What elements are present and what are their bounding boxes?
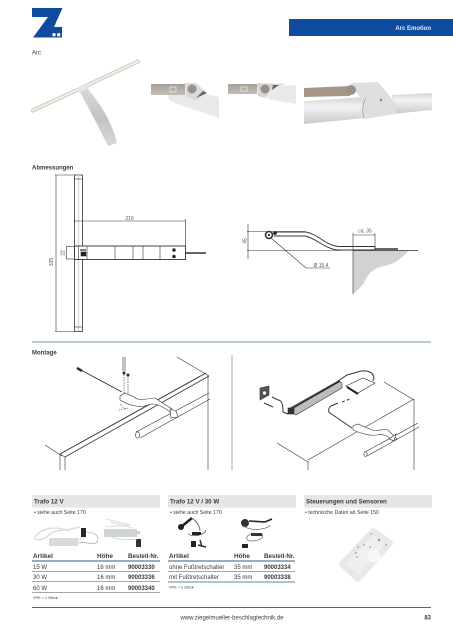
label: Arc: Arc <box>32 50 41 56</box>
label: Montage: Montage <box>32 350 57 356</box>
table: Artikel <box>33 553 53 560</box>
photo: joint detail 2 <box>228 83 296 104</box>
note: • siehe auch Seite 170 <box>170 510 222 516</box>
photo: Arc lamp <box>33 62 138 146</box>
table: Höhe <box>234 553 250 560</box>
table: 16 mm <box>97 586 115 592</box>
logo <box>32 8 62 38</box>
table <box>32 553 160 600</box>
product photos <box>35 519 141 547</box>
table: 30 W <box>33 575 47 581</box>
dimension labels top view: 210 <box>125 216 134 222</box>
footer website: www.ziegelmueller-beschlagtechnik.de <box>179 616 284 622</box>
divider <box>32 341 431 343</box>
table: 16 mm <box>97 575 115 581</box>
table: VPE = 1 Stück <box>169 586 194 590</box>
label: Abmessungen: Abmessungen <box>32 166 74 172</box>
product photos <box>178 518 272 548</box>
table: Bestell-Nr. <box>264 553 295 560</box>
heading bar: Trafo 12 V <box>34 498 64 506</box>
heading bar: Trafo 12 V / 30 W <box>170 498 219 506</box>
page number: 83 <box>424 616 432 622</box>
footer rule <box>32 606 431 608</box>
photo: joint detail 1 <box>151 83 219 118</box>
table: 35 mm <box>234 575 252 581</box>
panel: Trafo 12 V / 30 W <box>168 495 296 590</box>
dimension labels side view: ca. 35 <box>358 228 372 234</box>
drawing: mounting left <box>45 357 210 470</box>
heading bar: Steuerungen und Sensoren <box>306 498 387 506</box>
drawing: dimensions top view <box>55 175 206 332</box>
divider: vertical <box>231 355 233 470</box>
photo: joint detail 3 <box>304 82 432 124</box>
dimension labels side view: 45 <box>242 238 248 244</box>
panel: Steuerungen und Sensoren <box>304 495 432 579</box>
table: 35 mm <box>234 565 252 571</box>
panel: Trafo 12 V <box>32 495 160 600</box>
table: 60 W <box>33 586 47 592</box>
dimension labels top view <box>49 216 134 266</box>
header banner <box>289 19 453 36</box>
table: 90003336 <box>128 575 155 581</box>
table: VPE = 1 Stück <box>33 596 58 600</box>
dimension labels top view: 335 <box>49 258 55 266</box>
table: Artikel <box>169 553 189 560</box>
table: 16 mm <box>97 565 115 571</box>
dimension labels side view <box>242 228 372 269</box>
table: Höhe <box>97 553 113 560</box>
table <box>168 553 295 590</box>
table: mit Fußtretschalter <box>169 575 219 581</box>
note: • technische Daten ab Seite 150 <box>305 510 379 516</box>
table: 15 W <box>33 565 47 571</box>
table: 90003334 <box>264 565 291 571</box>
table: 90003338 <box>264 575 291 581</box>
table: ohne Fußtretschalter <box>169 565 224 571</box>
header banner: Arc Emotion <box>395 26 431 32</box>
table: Bestell-Nr. <box>128 553 159 560</box>
icon: remote control <box>342 531 390 579</box>
table: 90003340 <box>128 586 155 592</box>
dimension labels top view: 22 <box>60 250 66 256</box>
dimension labels side view: Ø 15.4 <box>313 263 329 269</box>
drawing: mounting right <box>260 371 419 470</box>
drawing: side view section <box>247 224 418 294</box>
note: • siehe auch Seite 170 <box>34 510 86 516</box>
table: 90003330 <box>128 565 155 571</box>
